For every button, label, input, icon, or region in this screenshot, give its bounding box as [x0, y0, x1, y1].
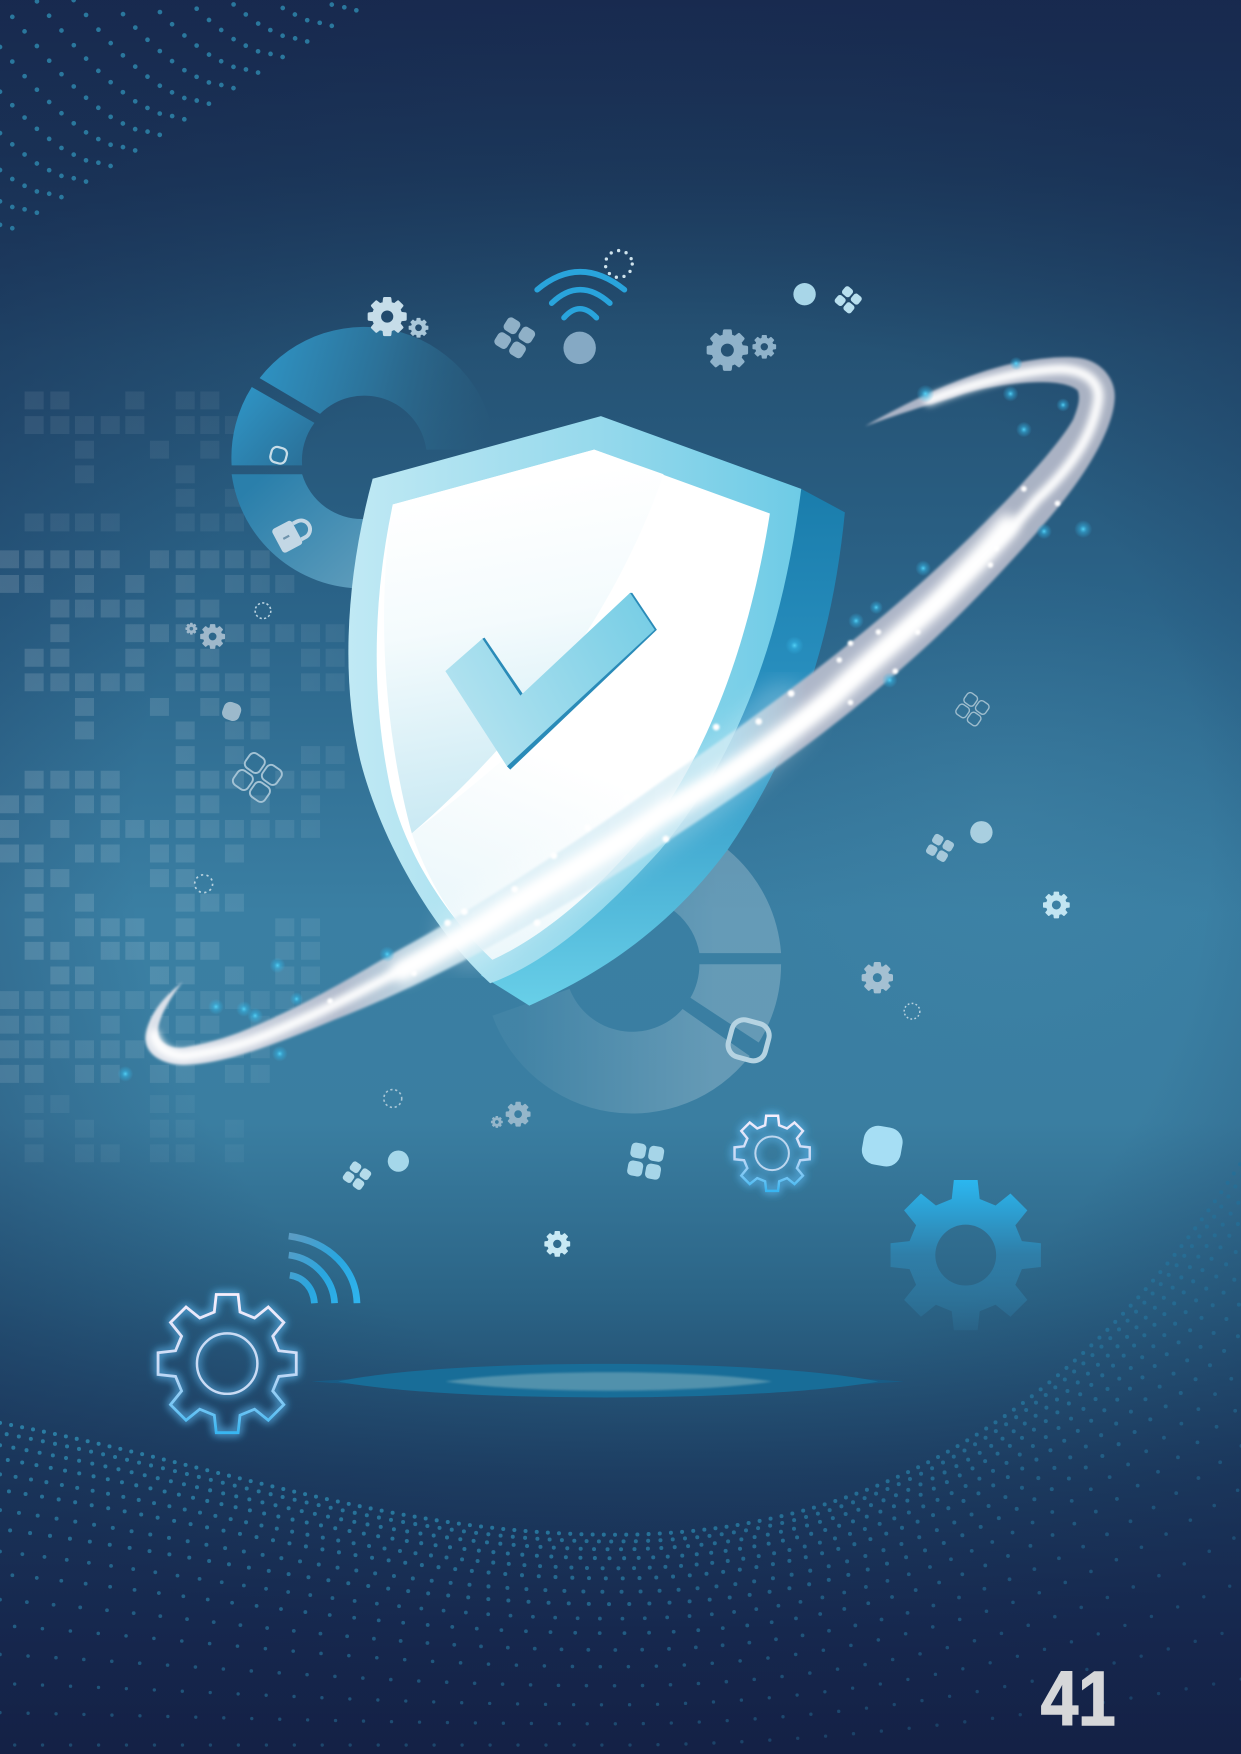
icon: wifi lower left [289, 1236, 357, 1303]
icon: large solid gear [891, 1180, 1041, 1330]
page number: 41 [1041, 1656, 1116, 1742]
cyan sparkles [117, 357, 1092, 1082]
icon: large glowing outline gear [158, 1295, 296, 1433]
icon: padlock [271, 513, 315, 554]
pixel grid pattern [0, 392, 345, 1162]
icon: tile cluster top [493, 316, 537, 360]
icon: glowing outline gear small [735, 1116, 810, 1191]
streak ribbon [145, 357, 1115, 1065]
icon: gear right [1044, 892, 1069, 918]
icon: dotted ring centre [384, 1090, 402, 1107]
icon: gears top right [708, 331, 775, 369]
icon: tiles and circle lower left [342, 1151, 409, 1191]
icon: gear right lower [863, 963, 892, 992]
streak bright core [154, 369, 1098, 1056]
light platform ellipse [311, 1364, 904, 1397]
shield side wall [481, 489, 845, 1006]
icon: gears left [186, 623, 224, 648]
icon: blob lower right [860, 1123, 905, 1169]
dotted corner wave, top left [0, 0, 373, 236]
security shield [348, 416, 845, 1006]
icon: tiles and circle right [925, 821, 993, 863]
icon: rounded square outline on upper donut [269, 446, 288, 465]
white sparkles [327, 486, 1060, 1004]
icon: wifi top [537, 272, 624, 364]
icon: tiles lower centre [626, 1142, 665, 1180]
donut chart, upper left [231, 327, 496, 588]
orbiting light streak [117, 357, 1115, 1082]
icon: gears top left [369, 298, 428, 337]
shield front frame [348, 416, 801, 983]
donut chart, lower right [492, 815, 781, 1114]
icon: gear lower centre [545, 1232, 569, 1256]
icon: circle and tiles top right [793, 283, 863, 315]
icon: outlined tile cluster right [954, 691, 990, 727]
icon: dotted ring left upper [255, 603, 271, 619]
icon: dotted ring top [605, 251, 632, 277]
icon: rounded square outline on lower donut [725, 1017, 772, 1064]
icon: blob left [220, 700, 243, 723]
icon: outlined tile cluster left [231, 751, 284, 804]
check mark [445, 593, 657, 770]
shield lower band tint [412, 626, 675, 960]
shield sheen [384, 450, 664, 833]
dotted wave field, bottom [0, 1152, 1241, 1745]
streak haze [470, 716, 783, 934]
icon: dotted ring left lower [195, 875, 213, 893]
shield white face [377, 450, 770, 960]
icon: dotted ring right [904, 1003, 920, 1019]
icon: gears centre [491, 1103, 530, 1128]
streak wide core [403, 526, 1007, 971]
